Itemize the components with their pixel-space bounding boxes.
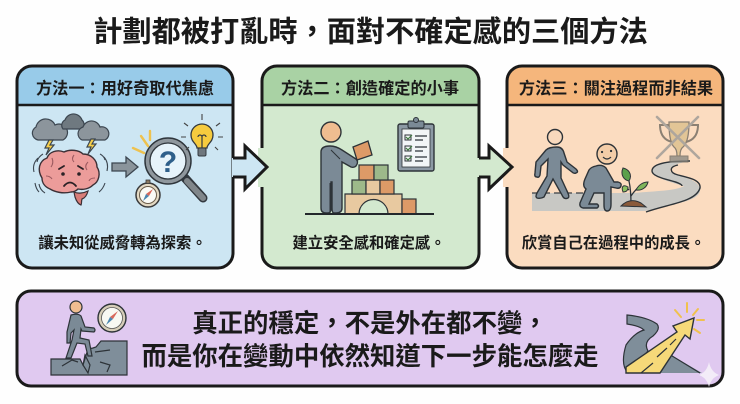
icon: checklist clipboard bbox=[398, 118, 434, 171]
icon: magnifier with question mark bbox=[133, 131, 203, 198]
panel: method three bbox=[507, 66, 723, 268]
heading: method two: 方法二：創造確定的小事 bbox=[281, 79, 459, 98]
title: 計劃都被打亂時，面對不確定感的三個方法 bbox=[93, 14, 648, 48]
arrow: method one to method two bbox=[232, 146, 267, 189]
heading: method three: 方法三：關注過程而非結果 bbox=[519, 79, 713, 98]
arrow: method two to method three bbox=[477, 146, 512, 189]
decorative sparkle bbox=[699, 362, 719, 387]
panel: conclusion banner bbox=[17, 291, 723, 387]
text: method three caption: 欣賞自己在過程中的成長。 bbox=[522, 234, 705, 252]
arrow: from brain to magnifier bbox=[112, 157, 138, 177]
icon: light bulb bbox=[181, 114, 223, 156]
icon: seedling bbox=[621, 168, 648, 207]
icon: winding path bbox=[532, 161, 700, 212]
text: method one caption: 讓未知從威脅轉為探索。 bbox=[38, 234, 207, 252]
text: conclusion line two: 而是你在變動中依然知道下一步能怎麼走 bbox=[141, 343, 599, 371]
icon: storm clouds bbox=[32, 114, 109, 155]
icon: block pyramid bbox=[345, 165, 416, 214]
icon: winding road with upward arrow bbox=[623, 303, 704, 373]
icon: compass bbox=[98, 304, 126, 332]
heading: method one: 方法一：用好奇取代焦慮 bbox=[36, 79, 214, 98]
text: method two caption: 建立安全感和確定感。 bbox=[293, 234, 445, 252]
icon: person stepping over cracked ground bbox=[51, 301, 127, 375]
icon: worried brain bbox=[34, 150, 108, 205]
ground line bbox=[305, 213, 434, 215]
panel: method one bbox=[17, 66, 233, 268]
panel: method two bbox=[262, 66, 479, 268]
icon: magnifier with question mark: ? bbox=[159, 146, 177, 179]
text: conclusion line one: 真正的穩定，不是外在都不變， bbox=[192, 310, 548, 338]
icon: crossed-out trophy bbox=[657, 117, 699, 162]
icon: person stacking blocks bbox=[321, 122, 372, 213]
icon: kneeling smiling person bbox=[580, 144, 621, 211]
icon: compass bbox=[136, 180, 160, 207]
icon: walking person bbox=[535, 130, 578, 199]
